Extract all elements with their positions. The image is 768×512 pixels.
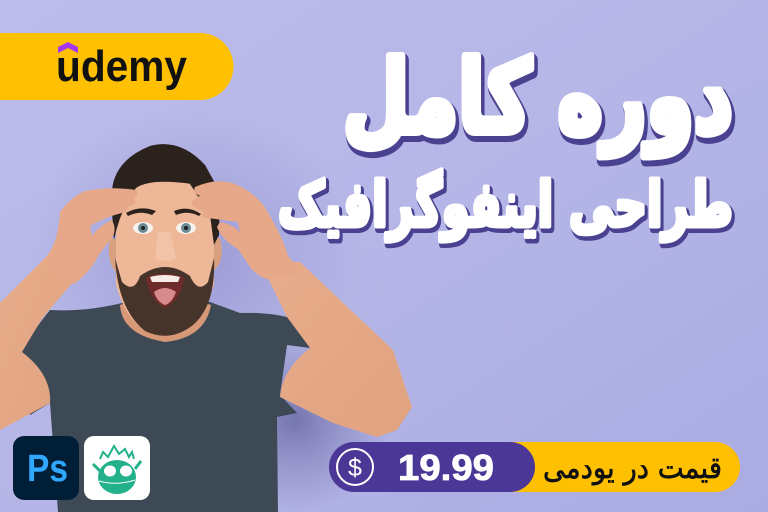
panel: udemy logo pill: [0, 33, 234, 100]
hair right side: [190, 165, 220, 245]
icon: photoshop: Ps: [27, 448, 68, 490]
left hand: [45, 188, 137, 284]
right hand: [192, 181, 302, 280]
eyebrows: [126, 208, 201, 216]
man photo illustration: [0, 144, 412, 512]
icon: dollar coin: [337, 449, 373, 485]
shirt: [22, 302, 310, 512]
eyes: [133, 222, 196, 234]
face: [116, 180, 214, 335]
price value background: [329, 442, 535, 492]
ears: [109, 238, 222, 272]
icon: green robot app: [84, 436, 150, 500]
label: price on udemy: قیمت در یودمی: [543, 451, 722, 486]
panel: price pill: [329, 442, 740, 492]
hair: [112, 144, 216, 240]
icon: photoshop: [13, 436, 79, 500]
nose: [155, 232, 176, 261]
left arm: [0, 258, 75, 430]
mouth: [146, 274, 184, 308]
udemy wordmark: udemy: [56, 42, 187, 91]
icon: dollar coin: $: [348, 454, 362, 482]
right arm: [260, 262, 412, 437]
neck: [120, 290, 211, 342]
icon: udemy chevron: [58, 42, 78, 53]
beard: [115, 258, 214, 336]
price value: 19.99: [398, 447, 494, 488]
